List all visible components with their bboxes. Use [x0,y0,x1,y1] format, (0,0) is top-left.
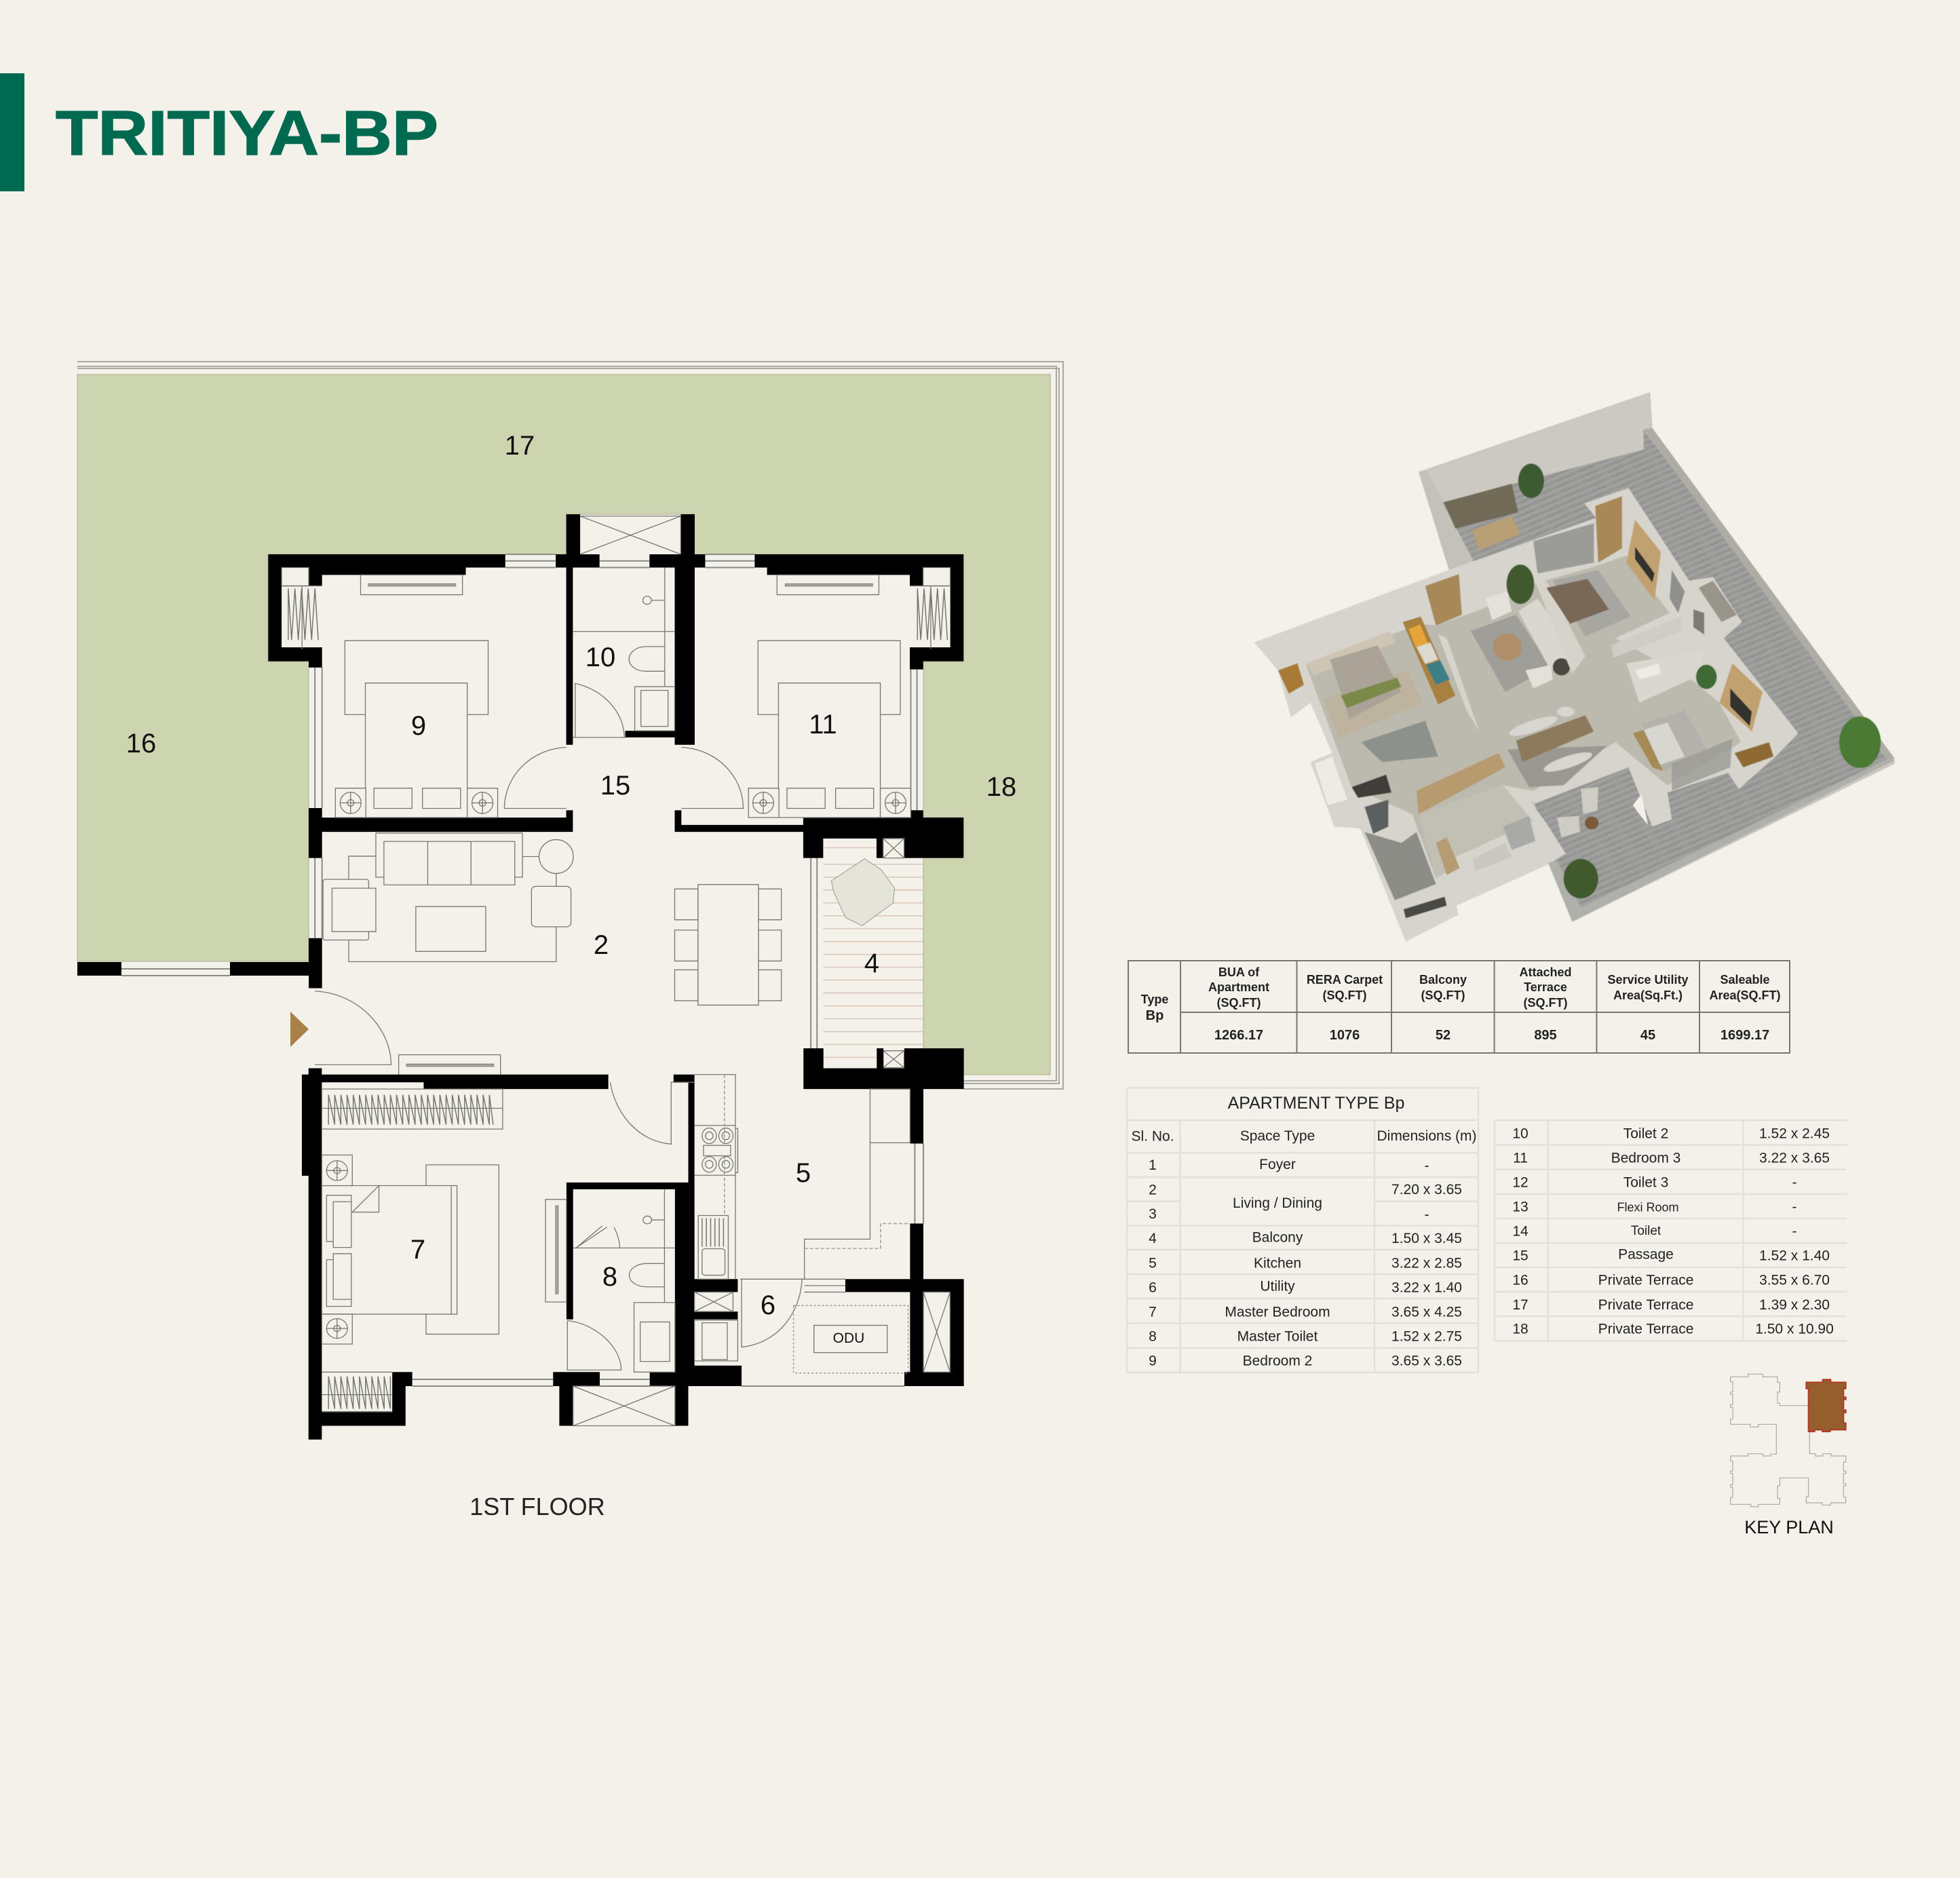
interior floor [1306,556,1741,879]
apartment type table, rooms 1 to 9: 2 [1149,1182,1157,1198]
area summary table: Bp [1146,1008,1164,1023]
room numbers: 15 [600,771,630,801]
apartment type table, rooms 1 to 9: Balcony [1252,1229,1303,1246]
key plan label: KEY PLAN [1744,1517,1834,1537]
master door [610,1082,695,1144]
apartment type table, rooms 1 to 9: 6 [1149,1280,1157,1296]
apartment type table, rooms 10 to 18: 14 [1512,1224,1529,1239]
area summary table: Attached [1519,965,1572,979]
bottom shaft [573,1386,675,1426]
key plan diagram [1731,1374,1846,1507]
apartment type table, rooms 10 to 18: 15 [1512,1248,1529,1263]
bedroom 3 [1633,664,1773,790]
highlighted unit [1806,1379,1846,1432]
floor label: 1ST FLOOR [469,1493,605,1520]
toilet 10 fixtures [573,567,675,737]
foyer AC [399,1055,501,1076]
master toilet fixtures [567,1189,675,1372]
dining table [675,885,782,1005]
exterior black walls, absolute [77,962,309,976]
kitchen counter [695,1075,737,1279]
apartment type table, rooms 1 to 9: 4 [1149,1231,1157,1246]
wardrobe with shelves [1402,617,1455,704]
apartment type table, rooms 1 to 9: 1.52 x 2.75 [1391,1328,1462,1345]
apartment type table, rooms 1 to 9: 7 [1149,1304,1157,1320]
area summary table: BUA of [1218,965,1260,979]
room numbers [126,431,1016,1346]
shaft pockets [1315,756,1648,918]
utility sink [695,1320,737,1361]
room numbers: 10 [585,643,615,672]
apartment type table, rooms 10 to 18: 3.22 x 3.65 [1759,1151,1830,1166]
area summary table: (SQ.FT) [1217,996,1261,1010]
upper terrace sofa and table [1444,463,1544,550]
shaft squares [883,839,904,1068]
utility door [740,1279,845,1347]
apartment type table, rooms 1 to 9: 7.20 x 3.65 [1391,1182,1462,1197]
master bedroom TV [545,1200,566,1302]
apartment type table, rooms 10 to 18: Private Terrace [1598,1297,1693,1313]
bedroom 9 wardrobe [282,567,322,649]
area summary table: (SQ.FT) [1421,989,1465,1002]
room numbers: 6 [761,1290,775,1320]
plants [1564,716,1881,898]
house walls mass [1254,488,1798,942]
walls upper [268,514,963,989]
apartment type table, rooms 10 to 18: 1.52 x 2.45 [1759,1126,1830,1141]
apartment type table, rooms 1 to 9: Master Bedroom [1225,1304,1330,1320]
silhouette [1254,392,1895,942]
balcony decking [823,847,923,1057]
area summary table [1128,961,1790,1053]
apartment type table, rooms 10 to 18 [1495,1120,1847,1341]
area summary table: Apartment [1208,980,1269,994]
kitchen floor [1419,786,1533,879]
terrace window [121,969,230,976]
bottom wardrobe [322,1372,392,1411]
balcony lounge chair [831,859,895,925]
terrace chairs [1557,787,1598,837]
area summary table: Saleable [1720,973,1770,986]
apartment type table, rooms 10 to 18: Toilet 2 [1623,1126,1668,1141]
apartment type table, rooms 10 to 18: - [1792,1175,1796,1190]
apartment type table, rooms 1 to 9: 5 [1149,1255,1157,1271]
area summary table: RERA Carpet [1307,973,1383,986]
ODU zone [794,1305,908,1373]
area summary table: 45 [1640,1028,1655,1043]
lower part of plan: master bedroom, toilet, kitchen, utility [302,1048,964,1440]
area summary table: 1076 [1330,1028,1360,1043]
apartment type table, rooms 1 to 9: APARTMENT TYPE Bp [1228,1094,1404,1113]
terrace outline lines [77,362,1063,1089]
title accent bar [0,73,24,191]
apartment type table, rooms 1 to 9: - [1425,1158,1429,1174]
terrace decking [1442,430,1889,915]
kitchen counter [1417,753,1535,875]
apartment type table, rooms 1 to 9: - [1425,1207,1429,1223]
bedroom 11 furniture [748,575,910,818]
room numbers: 16 [126,729,156,759]
apartment type table, rooms 1 to 9: 3 [1149,1206,1157,1222]
entry door [1425,574,1462,626]
apartment type table, rooms 1 to 9: Space Type [1240,1128,1315,1144]
right shaft [923,1292,950,1372]
room numbers: 7 [410,1235,425,1265]
upper terrace wall [1425,394,1650,501]
apartment type table, rooms 10 to 18: 12 [1512,1175,1529,1190]
bedroom 11 wardrobe [910,567,950,649]
room numbers: 8 [602,1262,617,1292]
apartment type table, rooms 10 to 18: - [1792,1200,1796,1214]
area summary table: Area(SQ.FT) [1709,989,1781,1002]
apartment type table, rooms 10 to 18: 11 [1513,1151,1528,1166]
apartment type table, rooms 10 to 18: Passage [1618,1247,1674,1262]
room numbers: 9 [411,711,426,741]
apartment type table, rooms 10 to 18: 1.50 x 10.90 [1755,1322,1834,1337]
apartment type table, rooms 1 to 9: Bedroom 2 [1243,1353,1312,1369]
room numbers: 11 [809,710,837,740]
apartment type table, rooms 1 to 9: 3.65 x 4.25 [1391,1304,1462,1320]
apartment type table, rooms 1 to 9: 3.22 x 2.85 [1391,1255,1462,1271]
room numbers: 4 [864,948,879,978]
apartment type table, rooms 1 to 9: 1 [1149,1157,1157,1173]
bedroom 3 toilet walls [1611,617,1717,703]
apartment type table, rooms 10 to 18: 18 [1512,1322,1529,1337]
master toilet [1351,721,1438,798]
lower window lines [412,1379,904,1386]
utility machine [1364,800,1388,834]
apartment type table, rooms 10 to 18: 16 [1512,1273,1529,1288]
windows [315,554,917,1048]
room numbers: ODU [833,1330,864,1346]
apartment type table, rooms 10 to 18: 1.39 x 2.30 [1759,1297,1830,1313]
3D isometric render [1254,392,1895,942]
area summary table: Terrace [1524,980,1567,994]
area summary table: 1699.17 [1721,1028,1769,1043]
apartment type table, rooms 1 to 9: 3.65 x 3.65 [1391,1353,1462,1369]
bedroom 9 furniture [335,575,498,818]
apartment type table, rooms 10 to 18: 10 [1512,1126,1529,1141]
room numbers: 2 [594,930,609,960]
area summary table: Area(Sq.Ft.) [1613,989,1683,1002]
room numbers: 17 [505,431,535,461]
top shaft [580,516,681,554]
private terrace green area [77,375,1050,1075]
kitchen fridge and partition [805,1089,923,1279]
side windows and shaft [1670,570,1737,634]
walls lower [302,1048,964,1440]
area summary table: 895 [1534,1028,1557,1043]
apartment type table, rooms 10 to 18: Flexi Room [1617,1201,1679,1214]
entry arrow [290,1012,309,1047]
living room [1471,564,1577,692]
left return wall [1419,471,1475,570]
apartment type table, rooms 1 to 9: Foyer [1259,1157,1296,1172]
apartment type table, rooms 1 to 9: Living / Dining [1233,1195,1322,1211]
service balcony floor [1364,832,1436,900]
area summary table: (SQ.FT) [1524,996,1567,1010]
master bed [322,1155,499,1344]
apartment type table, rooms 10 to 18: Toilet 3 [1623,1175,1668,1190]
floor plan [77,362,1063,1520]
partition wall [1438,634,1479,731]
apartment type table, rooms 1 to 9: Master Toilet [1237,1328,1318,1345]
apartment type table, rooms 1 to 9: Dimensions (m) [1377,1128,1477,1144]
living room furniture [323,833,573,962]
apartment type table, rooms 10 to 18: 13 [1512,1200,1529,1214]
room numbers: 5 [796,1158,811,1188]
area summary table: Service Utility [1607,973,1689,986]
apartment type table, rooms 1 to 9: Kitchen [1254,1255,1301,1271]
apartment type table, rooms 10 to 18: Toilet [1631,1224,1661,1238]
apartment type table, rooms 10 to 18: - [1792,1224,1796,1239]
apartment type table, rooms 10 to 18: 3.55 x 6.70 [1759,1273,1830,1288]
bedroom 2 [1533,496,1661,636]
apartment type table, rooms 1 to 9: 3.22 x 1.40 [1391,1280,1462,1296]
area summary table: 52 [1436,1028,1450,1043]
apartment type table, rooms 10 to 18: 1.52 x 1.40 [1759,1248,1830,1263]
key plan [1731,1374,1846,1537]
upper part of plan: bedrooms, toilet, living, dining, balcony [268,514,963,1076]
bedroom 11 door [681,748,744,808]
area summary table: Balcony [1419,973,1467,986]
area summary table: (SQ.FT) [1323,989,1366,1002]
master bedroom [1278,631,1423,739]
apartment type table, rooms 1 to 9: 1.50 x 3.45 [1391,1231,1462,1246]
partition behind sofa [1535,581,1586,674]
master wardrobe [322,1089,503,1129]
parapet bottom [1548,759,1895,922]
entry door [315,991,391,1065]
apartment type table, rooms 10 to 18: Private Terrace [1598,1322,1693,1337]
apartment type table, rooms 1 to 9: 9 [1149,1353,1157,1369]
apartment type table, rooms 1 to 9: Utility [1260,1278,1295,1295]
title: TRITIYA-BP [56,98,438,168]
right parapet [1644,428,1895,760]
apartment type table, rooms 10 to 18: Bedroom 3 [1611,1151,1680,1166]
area summary table: Type [1141,993,1168,1006]
apartment type table, rooms 1 to 9: 8 [1149,1328,1157,1345]
apartment type table, rooms 10 to 18: 17 [1512,1297,1529,1313]
apartment type table, rooms 1 to 9 [1127,1088,1478,1373]
bedroom 9 door [504,748,566,808]
utility shaft [695,1292,733,1311]
apartment type table, rooms 10 to 18: Private Terrace [1598,1273,1693,1288]
dining [1507,707,1607,787]
room numbers: 18 [986,772,1016,802]
area summary table: 1266.17 [1214,1028,1263,1043]
apartment type table, rooms 1 to 9: Sl. No. [1131,1129,1174,1144]
